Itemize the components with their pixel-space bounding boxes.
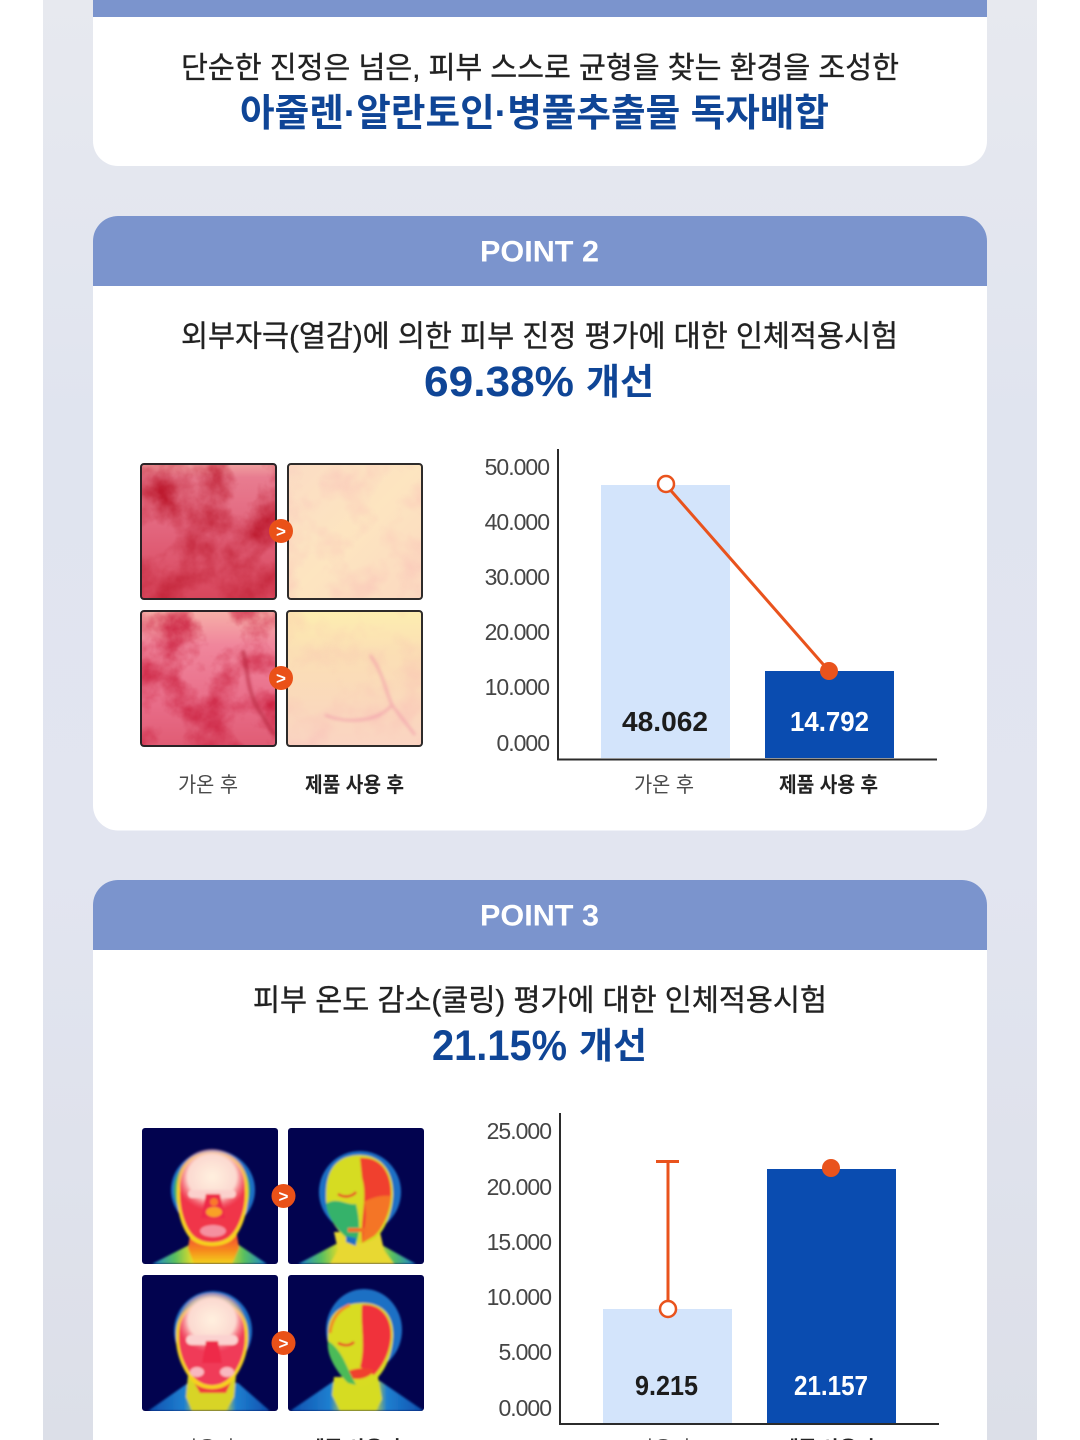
panel: point 1 card: 아줄렌·알란토인·병풀추출물 독자배합 — [240, 93, 829, 135]
x label: after: 제품 사용 후 — [779, 774, 878, 797]
y axis labels: 20.000 — [485, 619, 549, 645]
y axis labels: 10.000 — [485, 674, 549, 700]
photo: skin after 1 — [288, 464, 422, 599]
bar: before — [603, 1309, 732, 1423]
thermal: before 2 — [142, 1275, 278, 1411]
point 2 result — [424, 358, 654, 406]
y axis labels: 40.000 — [485, 509, 549, 535]
arrow: upper before to after — [272, 1184, 296, 1208]
y axis labels: 25.000 — [487, 1118, 551, 1144]
point 3 header: POINT 3 — [480, 900, 599, 932]
y axis labels: 30.000 — [485, 564, 549, 590]
value: before: 48.062 — [622, 706, 708, 737]
y axis labels: 50.000 — [485, 454, 549, 480]
photo label: after: 제품 사용 후 — [305, 774, 404, 797]
y axis labels: 20.000 — [487, 1174, 551, 1200]
point 3 result: 개선 — [579, 1025, 647, 1066]
y axis labels: 10.000 — [487, 1284, 551, 1310]
x label: before: 가온 후 — [634, 774, 694, 797]
bar chart: point 2 — [485, 449, 937, 797]
y axis labels: 5.000 — [498, 1339, 551, 1365]
photo: skin before 2 — [141, 611, 276, 746]
arrow: lower before to after — [272, 1331, 296, 1355]
arrow: lower before to after: > — [276, 669, 286, 688]
bar: after — [767, 1169, 896, 1423]
thermal: after 2 — [288, 1275, 424, 1411]
point 2 result: 69.38% — [424, 358, 574, 406]
point 3 header — [93, 880, 987, 950]
value: after: 14.792 — [790, 706, 869, 737]
y axis labels: 0.000 — [496, 730, 549, 756]
panel: point 1 card — [93, 0, 987, 166]
point 2 header: POINT 2 — [480, 236, 599, 268]
y axis labels — [485, 454, 549, 756]
trend line — [658, 476, 838, 680]
point 2 description: 외부자극(열감)에 의한 피부 진정 평가에 대한 인체적용시험 — [181, 320, 898, 354]
point 2 header — [93, 216, 987, 286]
y axis labels: 0.000 — [498, 1395, 551, 1421]
bar chart: point 3 — [487, 1113, 939, 1440]
point 3 result: 21.15% — [432, 1022, 567, 1070]
thermal: after 1 — [288, 1128, 424, 1264]
point 3 description: 피부 온도 감소(쿨링) 평가에 대한 인체적용시험 — [253, 984, 827, 1018]
panel: point 1 card: 단순한 진정은 넘은, 피부 스스로 균형을 찾는 환경을 조성한 — [181, 52, 899, 85]
bar: after — [765, 671, 894, 758]
panel: point 2 card — [93, 216, 987, 830]
y axis labels: 15.000 — [487, 1229, 551, 1255]
value: after: 21.157 — [794, 1370, 868, 1401]
value: before: 9.215 — [635, 1370, 698, 1401]
y axis labels — [487, 1118, 551, 1421]
arrow: lower before to after — [269, 666, 293, 690]
panel: point 3 card — [93, 880, 987, 1440]
arrow: upper before to after — [269, 519, 293, 543]
thermal photos before and after — [142, 1128, 424, 1440]
difference bracket — [656, 1159, 840, 1317]
arrow: lower before to after: > — [279, 1334, 289, 1353]
skin photos before and after — [141, 464, 422, 797]
point 2 result: 개선 — [586, 361, 654, 402]
thermal: before 1 — [142, 1128, 278, 1264]
photo label: before: 가온 후 — [178, 774, 238, 797]
arrow: upper before to after: > — [279, 1187, 289, 1206]
photo: skin after 2 — [287, 611, 422, 746]
bar: before — [601, 485, 730, 758]
point 3 result — [432, 1022, 647, 1070]
photo: skin before 1 — [141, 464, 276, 599]
arrow: upper before to after: > — [276, 522, 286, 541]
